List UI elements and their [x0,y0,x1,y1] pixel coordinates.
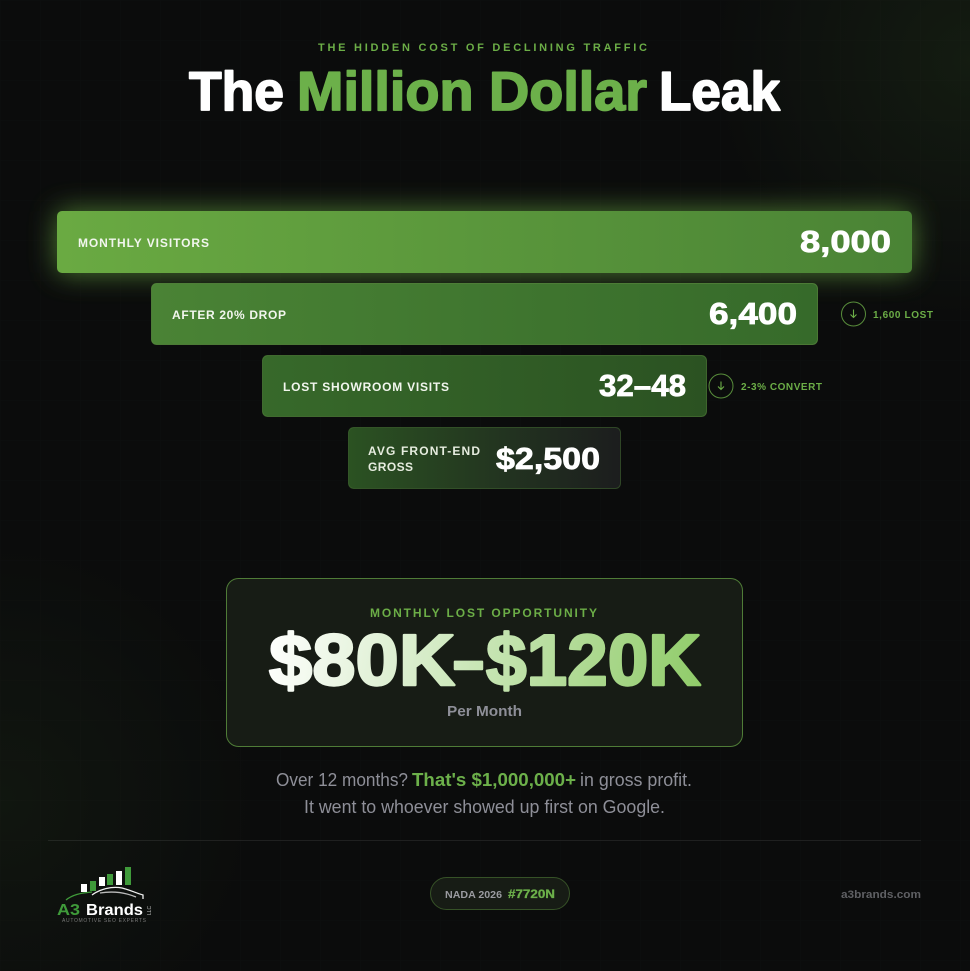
logo bars [81,867,131,892]
summary text: in gross profit. [580,770,692,790]
booth pill [430,878,570,910]
title [189,60,780,122]
annotation: 2-3% convert [709,374,822,398]
big figure: $120K [486,621,701,701]
big figure: – [453,621,484,701]
title: Million Dollar [297,60,647,122]
big figure [269,621,701,701]
panel label: MONTHLY LOST OPPORTUNITY [370,606,597,620]
funnel bar: after 20% drop: 6,400 [709,296,797,331]
booth pill: NADA 2026 [445,889,502,901]
funnel bar: monthly visitors: MONTHLY VISITORS [78,236,209,250]
annotation: 1,600 lost: 1,600 LOST [873,310,933,321]
logo wordmark: Brands [86,902,143,919]
panel: monthly lost opportunity [226,578,742,746]
eyebrow: THE HIDDEN COST OF DECLINING TRAFFIC [318,42,647,54]
logo: A3 Brands [57,867,153,924]
funnel bar: lost showroom visits: LOST SHOWROOM VISITS [283,380,449,394]
annotation: 2-3% convert: 2-3% CONVERT [741,382,822,393]
summary text: It went to whoever showed up first on Google. [304,797,665,817]
funnel bar: monthly visitors: 8,000 [800,224,891,259]
funnel bar: after 20% drop [152,284,818,344]
funnel bar: monthly visitors [57,211,912,273]
funnel bar: avg front-end gross: $2,500 [496,441,600,476]
funnel bar: avg front-end gross: GROSS [368,460,413,474]
website: a3brands.com [841,889,921,901]
annotation: 1,600 lost [842,302,933,326]
summary text: That's $1,000,000+ [412,770,576,790]
funnel bar: avg front-end gross [348,428,620,488]
summary text [276,770,692,817]
footer divider [48,840,921,842]
title: Leak [659,60,780,122]
logo car [66,887,143,900]
per month: Per Month [447,704,522,720]
logo tagline: AUTOMOTIVE SEO EXPERTS [62,918,147,924]
summary text: Over 12 months? [276,770,408,790]
logo wordmark [57,902,143,919]
big figure: $80K [269,621,455,701]
booth pill: #7720N [508,887,555,901]
logo LLC: LLC [147,905,153,915]
title: The [189,60,284,122]
funnel [57,211,933,488]
logo wordmark: A3 [57,902,80,919]
funnel bar: after 20% drop: AFTER 20% DROP [172,308,286,322]
funnel bar: avg front-end gross: AVG FRONT-END [368,444,480,458]
funnel bar: lost showroom visits [262,356,706,416]
funnel bar: lost showroom visits: 32–48 [599,368,686,403]
